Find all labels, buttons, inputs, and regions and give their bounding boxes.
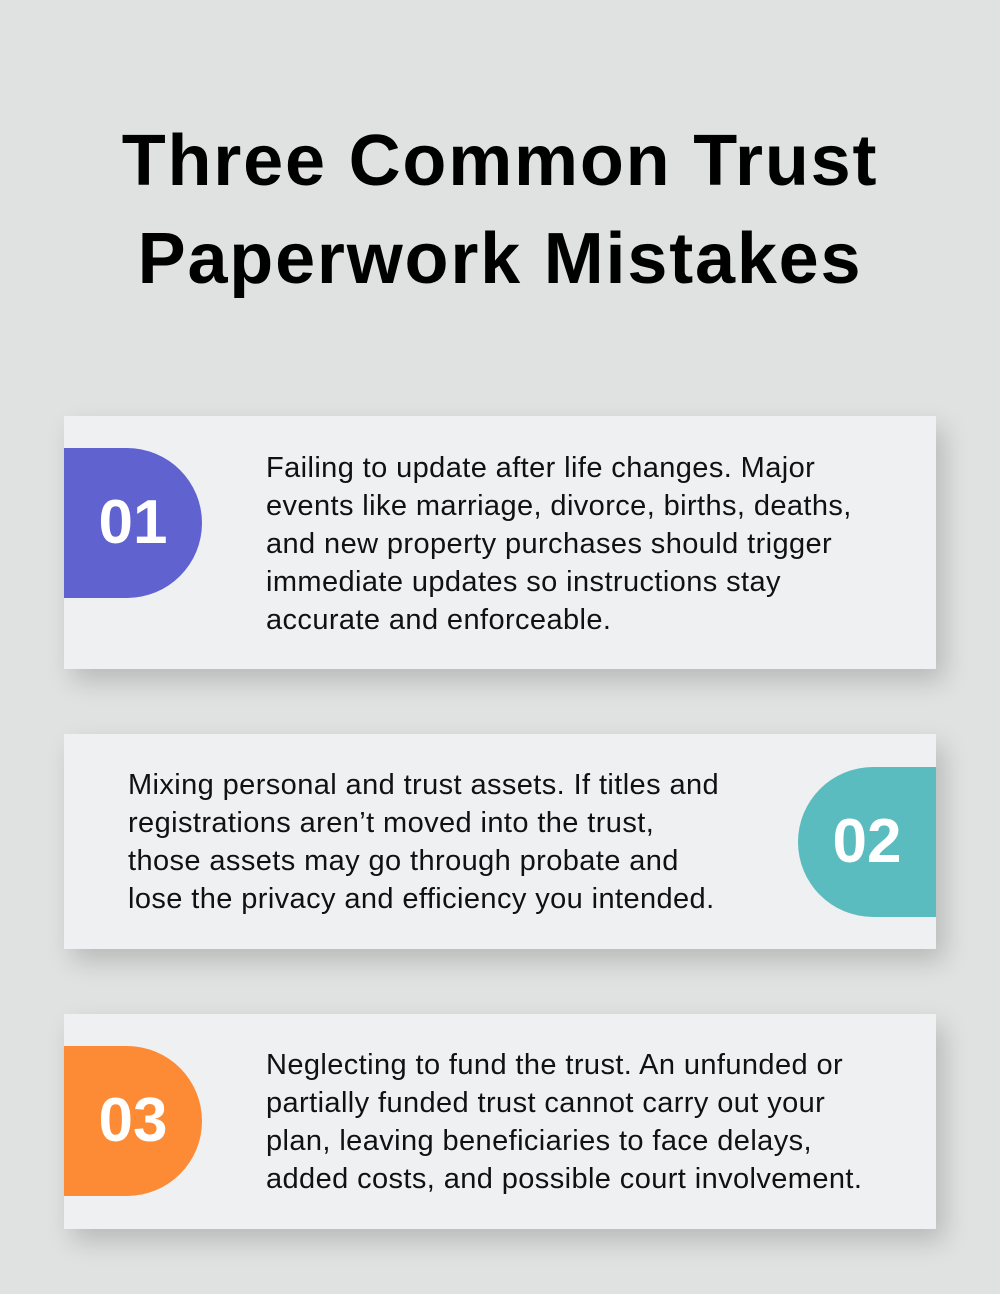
text 02: lose the privacy and efficiency you intended. — [128, 883, 715, 915]
text 01: and new property purchases should trigger — [266, 528, 832, 560]
text 02: those assets may go through probate and — [128, 845, 679, 877]
badge 03 — [64, 1046, 202, 1196]
text 02 — [128, 769, 719, 915]
title: Paperwork Mistakes — [138, 219, 862, 299]
badge 02: 02 — [833, 807, 901, 876]
text 03: Neglecting to fund the trust. An unfunded or — [266, 1049, 843, 1081]
text 01: immediate updates so instructions stay — [266, 566, 781, 598]
text 01: accurate and enforceable. — [266, 604, 611, 636]
badge 01: 01 — [99, 488, 167, 557]
text 01: Failing to update after life changes. Major — [266, 452, 815, 484]
panel: mistake 03 — [64, 1014, 936, 1229]
badge 02 — [798, 767, 936, 917]
title — [122, 121, 878, 299]
text 03: plan, leaving beneficiaries to face delays, — [266, 1125, 812, 1157]
text 03 — [266, 1049, 862, 1195]
text 01: events like marriage, divorce, births, deaths, — [266, 490, 852, 522]
text 01 — [266, 452, 852, 636]
badge 03: 03 — [99, 1086, 167, 1155]
text 03: added costs, and possible court involvement. — [266, 1163, 862, 1195]
text 02: Mixing personal and trust assets. If titles and — [128, 769, 719, 801]
panel: mistake 01 — [64, 416, 936, 669]
badge 01 — [64, 448, 202, 598]
title: Three Common Trust — [122, 121, 878, 201]
text 03: partially funded trust cannot carry out your — [266, 1087, 825, 1119]
panel: mistake 02 — [64, 734, 936, 949]
text 02: registrations aren’t moved into the trust, — [128, 807, 654, 839]
